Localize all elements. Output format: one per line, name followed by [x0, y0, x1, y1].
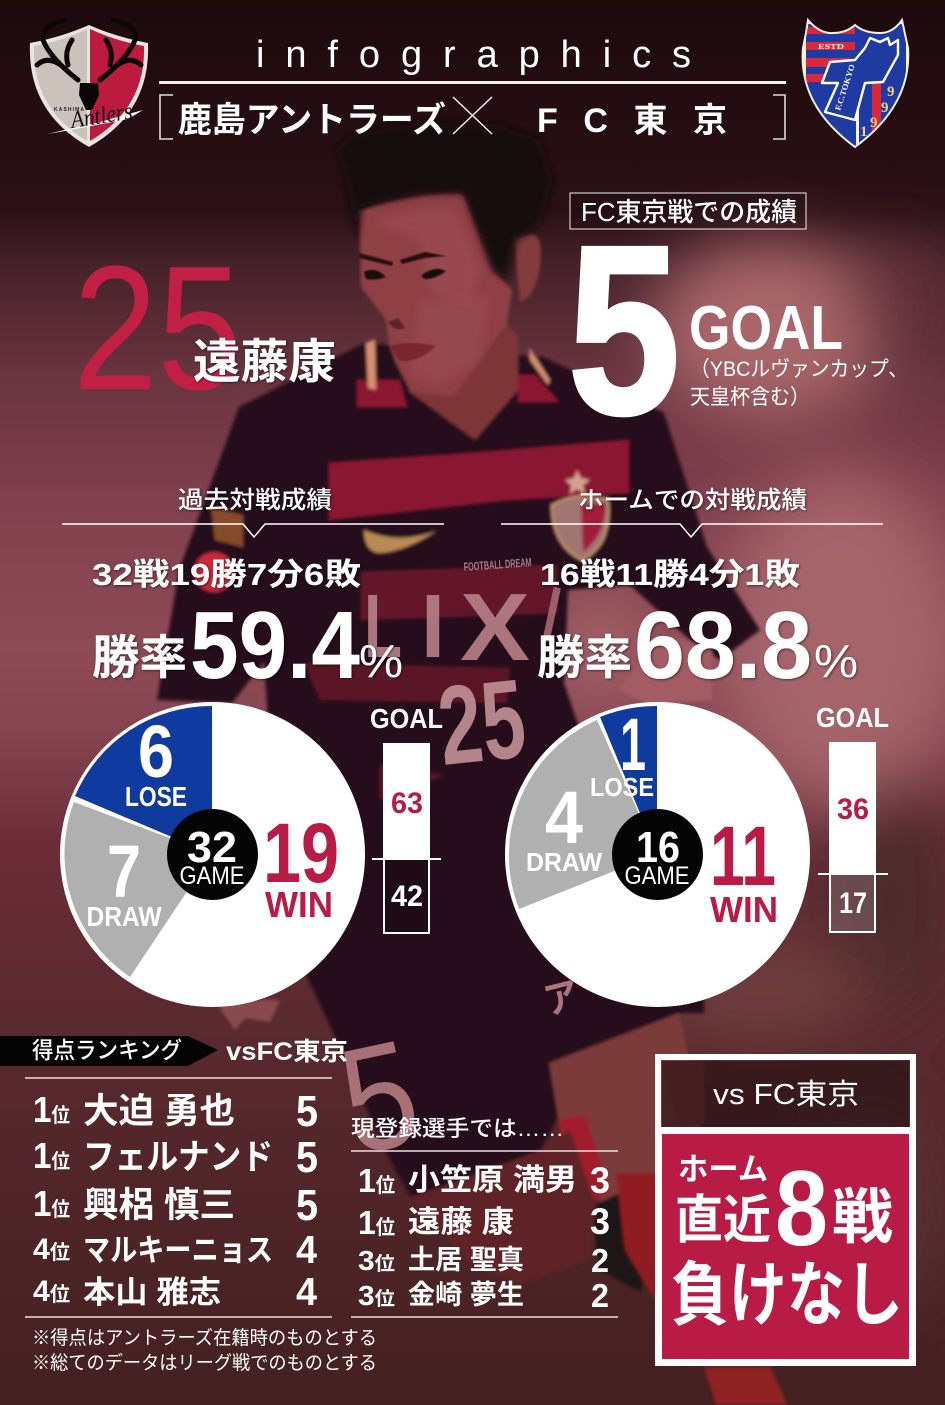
logo: Kashima Antlers crest: Antlers: [67, 99, 134, 134]
pie chart: 7: [107, 830, 141, 913]
ranking header tag: 得点ランキング: [32, 1037, 182, 1063]
goal bar: [816, 702, 889, 932]
squad rows: [358, 1160, 610, 1314]
ranking rows: 4位: [33, 1275, 70, 1308]
logo: FC Tokyo crest: 1: [860, 124, 868, 140]
squad rows: 3: [590, 1201, 610, 1242]
pie chart: GAME: [624, 862, 690, 890]
ranking rows: 4: [296, 1229, 317, 1272]
callout: unbeaten at home: 直近: [675, 1192, 771, 1250]
panel: current squad ranking: [351, 1116, 618, 1317]
jersey sponsor lettering: [327, 555, 583, 1186]
squad rows: 小笠原 満男: [408, 1164, 577, 1197]
pie chart: GAME: [180, 862, 244, 890]
pie chart: 11: [710, 809, 776, 903]
ranking rows: 興梠 慎三: [83, 1186, 235, 1225]
logo: FC Tokyo crest: [803, 20, 908, 147]
goal bar: 36: [837, 793, 869, 826]
pie chart: 19: [263, 806, 339, 900]
footnotes: [32, 1327, 377, 1374]
pie chart: LOSE: [125, 781, 187, 812]
win rate: 68.8: [634, 592, 812, 699]
vs label: vsFC東京: [226, 1038, 348, 1066]
win rate: %: [814, 635, 858, 687]
jersey sponsor lettering: I: [421, 577, 445, 677]
pie chart: DRAW: [526, 847, 602, 877]
panel: scoring ranking: [0, 1036, 377, 1374]
goal bar: 42: [391, 880, 423, 913]
pie chart: [60, 702, 365, 1007]
player number 25: 25: [73, 229, 242, 427]
ranking rows: 5: [296, 1133, 318, 1182]
panel: past head-to-head: [60, 487, 444, 1007]
big stat: 5 goal: 5: [568, 196, 680, 464]
pie chart: WIN: [265, 884, 333, 925]
callout: unbeaten at home: 戦: [832, 1184, 893, 1251]
callout: unbeaten at home: ホーム: [678, 1152, 768, 1187]
pie chart: 6: [138, 710, 174, 793]
big stat: 5 goal: [568, 196, 908, 464]
callout: unbeaten at home: 8: [775, 1148, 828, 1268]
section heading: ホームでの対戦成績: [578, 487, 807, 514]
win rate: [92, 592, 403, 699]
title: infographics: infographics: [256, 34, 691, 76]
ranking rows: マルキーニョス: [83, 1233, 273, 1268]
pie chart: [505, 702, 810, 1007]
goal bar: 63: [391, 787, 423, 820]
callout: unbeaten at home: vs FC東京: [713, 1078, 859, 1111]
ranking header tag: [0, 1036, 218, 1066]
logo: FC Tokyo crest: ESTD: [818, 42, 845, 51]
squad rows: 3位: [358, 1245, 395, 1276]
jersey sponsor lettering: L: [364, 577, 402, 677]
big stat: 5 goal: （YBCルヴァンカップ、: [690, 358, 908, 381]
big stat: 5 goal: GOAL: [689, 294, 843, 363]
squad rows: 1位: [358, 1204, 395, 1241]
squad rows: 遠藤 康: [408, 1206, 514, 1239]
logo: FC Tokyo crest: 9: [887, 84, 894, 100]
player name: 遠藤康: [193, 335, 336, 388]
callout: unbeaten at home: 負けなし: [671, 1256, 903, 1334]
squad rows: 3: [590, 1160, 610, 1201]
header rule: [159, 81, 786, 84]
logo: FC Tokyo crest: 9: [870, 115, 878, 131]
record: 32戦19勝7分6敗: [92, 557, 361, 592]
goal bar: GOAL: [816, 702, 889, 733]
squad rows: 3位: [358, 1280, 395, 1311]
pie chart: 32: [187, 823, 237, 872]
logo: FC Tokyo crest: F.C.TOKYO: [833, 63, 857, 112]
squad rows: 土居 聖真: [408, 1245, 524, 1275]
label: FC東京戦での成績: FC東京戦での成績: [581, 197, 797, 227]
pie chart: 16: [636, 823, 680, 872]
pie chart: 1: [620, 703, 646, 786]
jersey sponsor lettering: X: [460, 574, 530, 681]
squad rows: 1位: [358, 1162, 395, 1199]
win rate: [537, 592, 858, 699]
record: 16戦11勝4分1敗: [540, 557, 800, 592]
ranking rows: 5: [296, 1087, 318, 1136]
pie chart: WIN: [710, 889, 778, 930]
logo: Kashima Antlers crest: KASHIMA: [54, 107, 84, 113]
goal bar: GOAL: [370, 703, 443, 734]
squad rows: 2: [591, 1277, 609, 1314]
ranking rows: [33, 1087, 318, 1314]
footnotes: ※得点はアントラーズ在籍時のものとする: [32, 1327, 377, 1349]
ranking rows: 大迫 勇也: [83, 1092, 235, 1131]
jersey sponsor lettering: 5: [327, 1007, 432, 1186]
big stat: 5 goal: 天皇杯含む）: [690, 386, 810, 409]
footnotes: ※総てのデータはリーグ戦でのものとする: [32, 1352, 377, 1374]
ranking rows: 4: [296, 1271, 317, 1314]
logo: Kashima Antlers crest: [30, 20, 148, 147]
jersey sponsor lettering: FOOTBALL DREAM: [463, 555, 532, 574]
ranking rows: 1位: [33, 1135, 70, 1176]
pie chart: LOSE: [590, 772, 654, 802]
ranking rows: 5: [296, 1181, 318, 1230]
ranking rows: 1位: [33, 1183, 70, 1224]
pie chart: DRAW: [86, 901, 162, 932]
match-up heading: F C 東 京: [537, 102, 727, 140]
win rate: 59.4: [190, 592, 360, 699]
win rate: 勝率: [92, 631, 187, 684]
ranking rows: 4位: [33, 1233, 70, 1266]
ranking rows: フェルナンド: [83, 1138, 273, 1177]
goal bar: [370, 703, 443, 933]
jersey sponsor lettering: ア: [540, 975, 583, 1024]
ranking rows: 本山 雅志: [83, 1275, 221, 1310]
jersey sponsor lettering: 25: [432, 656, 531, 789]
match-up heading: [160, 95, 785, 140]
logo: FC Tokyo crest: 9: [881, 100, 888, 116]
match-up heading: 鹿島アントラーズ: [178, 100, 446, 140]
panel: home head-to-head: [501, 487, 889, 1007]
jersey sponsor lettering: I: [535, 570, 568, 660]
squad rows: 2: [591, 1242, 609, 1279]
goal bar: 17: [839, 887, 867, 920]
pie chart: 4: [545, 776, 583, 859]
section heading: 過去対戦成績: [178, 487, 332, 514]
squad heading: 現登録選手では……: [351, 1116, 564, 1141]
win rate: 勝率: [537, 631, 632, 684]
callout: unbeaten at home: [655, 1057, 916, 1366]
ranking rows: 1位: [33, 1089, 70, 1130]
win rate: %: [359, 635, 403, 687]
squad rows: 金崎 夢生: [408, 1280, 524, 1310]
